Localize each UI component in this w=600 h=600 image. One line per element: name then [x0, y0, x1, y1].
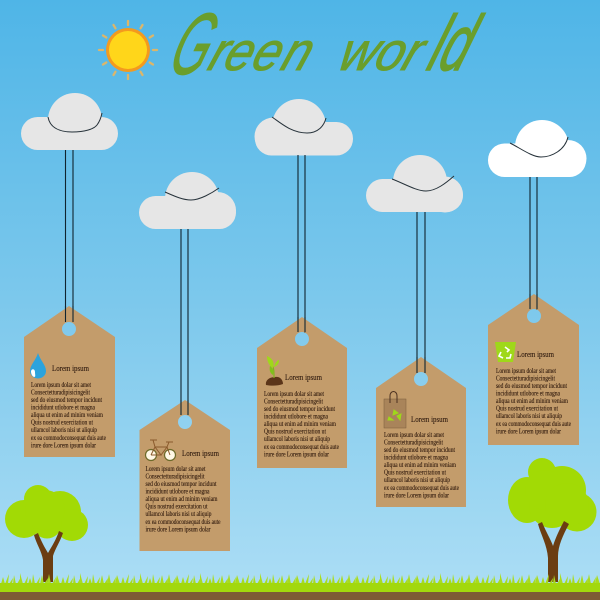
text block: tag 2: sed do eiusmod tempor incidunt [146, 481, 217, 488]
text block: tag 1: aliqua ut enim ad minim veniam [31, 412, 104, 419]
text block: tag 1: Consectetturadipisicingelit [31, 390, 90, 397]
cloud 2 [139, 172, 236, 229]
text block: tag 3: ex ea commodoconsequat duis aute [264, 444, 339, 451]
title: d [430, 0, 491, 87]
panel: hanging tag 1 with cloud [21, 93, 118, 457]
text block: tag 5: ullamcol laboris nisi ut aliquip [496, 413, 562, 420]
text block: tag 2: irure dore Lorem ipsum dolar [146, 526, 211, 533]
text block: tag 3: Consectetturadipisicingelit [264, 399, 323, 406]
text block: tag 3: sed do eiusmod tempor incidunt [264, 406, 335, 413]
text block: tag 3: irure dore Lorem ipsum dolar [264, 451, 330, 458]
text block: tag 5: aliqua ut enim ad minim veniam [496, 398, 569, 405]
text block: tag 2: Lorem ipsum dolar sit amet [146, 466, 206, 473]
title: l [419, 0, 463, 87]
text block: tag 2: Consectetturadipisicingelit [146, 474, 205, 481]
text block: tag 5: irure dore Lorem ipsum dolar [496, 428, 562, 435]
text block: tag 4 [384, 432, 459, 499]
icon: sprout [266, 356, 283, 386]
text block: tag 1 [31, 382, 106, 449]
text block: tag 3: ullamcol laboris nisi ut aliquip [264, 436, 330, 443]
text block: tag 1: irure dore Lorem ipsum dolar [31, 442, 97, 449]
icon: water drop [30, 353, 46, 379]
text block: tag 1: ex ea commodoconsequat duis aute [31, 435, 106, 442]
text block: tag 5 [496, 368, 571, 435]
text block: tag 4: irure dore Lorem ipsum dolar [384, 492, 450, 499]
text block: tag 1: Quis nostrud exercitation ut [31, 420, 93, 427]
text block: tag 3 [264, 391, 339, 458]
text block: tag 5: incididunt utlobore et magna [496, 391, 560, 398]
text block: tag 4: ex ea commodoconsequat duis aute [384, 485, 459, 492]
panel: hanging tag 5 with cloud [488, 120, 586, 445]
text block: tag 1: incididunt utlobore et magna [31, 405, 95, 412]
icon: bicycle [146, 440, 176, 460]
icon: recycling bag [384, 392, 406, 428]
text block: tag 2: Quis nostrud exercitation ut [146, 504, 208, 511]
icon: sun [99, 21, 157, 79]
title: wor [332, 22, 436, 82]
text block: tag 3: aliqua ut enim ad minim veniam [264, 421, 337, 428]
cloud 5 [488, 120, 586, 177]
heading: tag 1: Lorem ipsum [52, 363, 89, 373]
text block: tag 2 [146, 466, 220, 533]
icon: recycling bin [495, 342, 516, 362]
text block: tag 2: aliqua ut enim ad minim veniam [146, 496, 218, 503]
text block: tag 3: Lorem ipsum dolar sit amet [264, 391, 324, 398]
text block: tag 1: ullamcol laboris nisi ut aliquip [31, 427, 97, 434]
text block: tag 4: Lorem ipsum dolar sit amet [384, 432, 444, 439]
panel: hanging tag 3 with cloud [254, 99, 353, 468]
text block: tag 2: ex ea commodoconsequat duis aute [146, 519, 220, 526]
heading: tag 4: Lorem ipsum [411, 414, 448, 424]
text block: tag 1: sed do eiusmod tempor incidunt [31, 397, 102, 404]
cloud 1 [21, 93, 118, 150]
text block: tag 4: Quis nostrud exercitation ut [384, 470, 446, 477]
text block: tag 4: aliqua ut enim ad minim veniam [384, 462, 457, 469]
text block: tag 4: Consectetturadipisicingelit [384, 440, 443, 447]
heading: tag 5: Lorem ipsum [517, 349, 554, 359]
text block: tag 5: Lorem ipsum dolar sit amet [496, 368, 556, 375]
panel: hanging tag 2 with cloud [139, 172, 236, 551]
text block: tag 4: incididunt utlobore et magna [384, 455, 448, 462]
title: reen [202, 22, 323, 82]
cloud 3 [254, 99, 353, 156]
panel: hanging tag 4 with cloud [366, 155, 466, 507]
heading: tag 2: Lorem ipsum [182, 448, 219, 458]
heading: tag 3: Lorem ipsum [285, 372, 322, 382]
text block: tag 5: ex ea commodoconsequat duis aute [496, 421, 571, 428]
icon: left tree [5, 485, 88, 582]
grass and soil ground [0, 572, 600, 600]
text block: tag 2: incididunt utlobore et magna [146, 489, 210, 496]
text block: tag 3: incididunt utlobore et magna [264, 414, 328, 421]
text block: tag 5: Quis nostrud exercitation ut [496, 406, 558, 413]
text block: tag 4: ullamcol laboris nisi ut aliquip [384, 477, 450, 484]
text block: tag 2: ullamcol laboris nisi ut aliquip [146, 511, 212, 518]
text block: tag 5: Consectetturadipisicingelit [496, 376, 555, 383]
cloud 4 [366, 155, 463, 212]
text block: tag 4: sed do eiusmod tempor incidunt [384, 447, 455, 454]
icon: right tree [508, 458, 596, 582]
text block: tag 1: Lorem ipsum dolar sit amet [31, 382, 91, 389]
title [159, 0, 491, 93]
text block: tag 5: sed do eiusmod tempor incidunt [496, 383, 567, 390]
text block: tag 3: Quis nostrud exercitation ut [264, 429, 326, 436]
